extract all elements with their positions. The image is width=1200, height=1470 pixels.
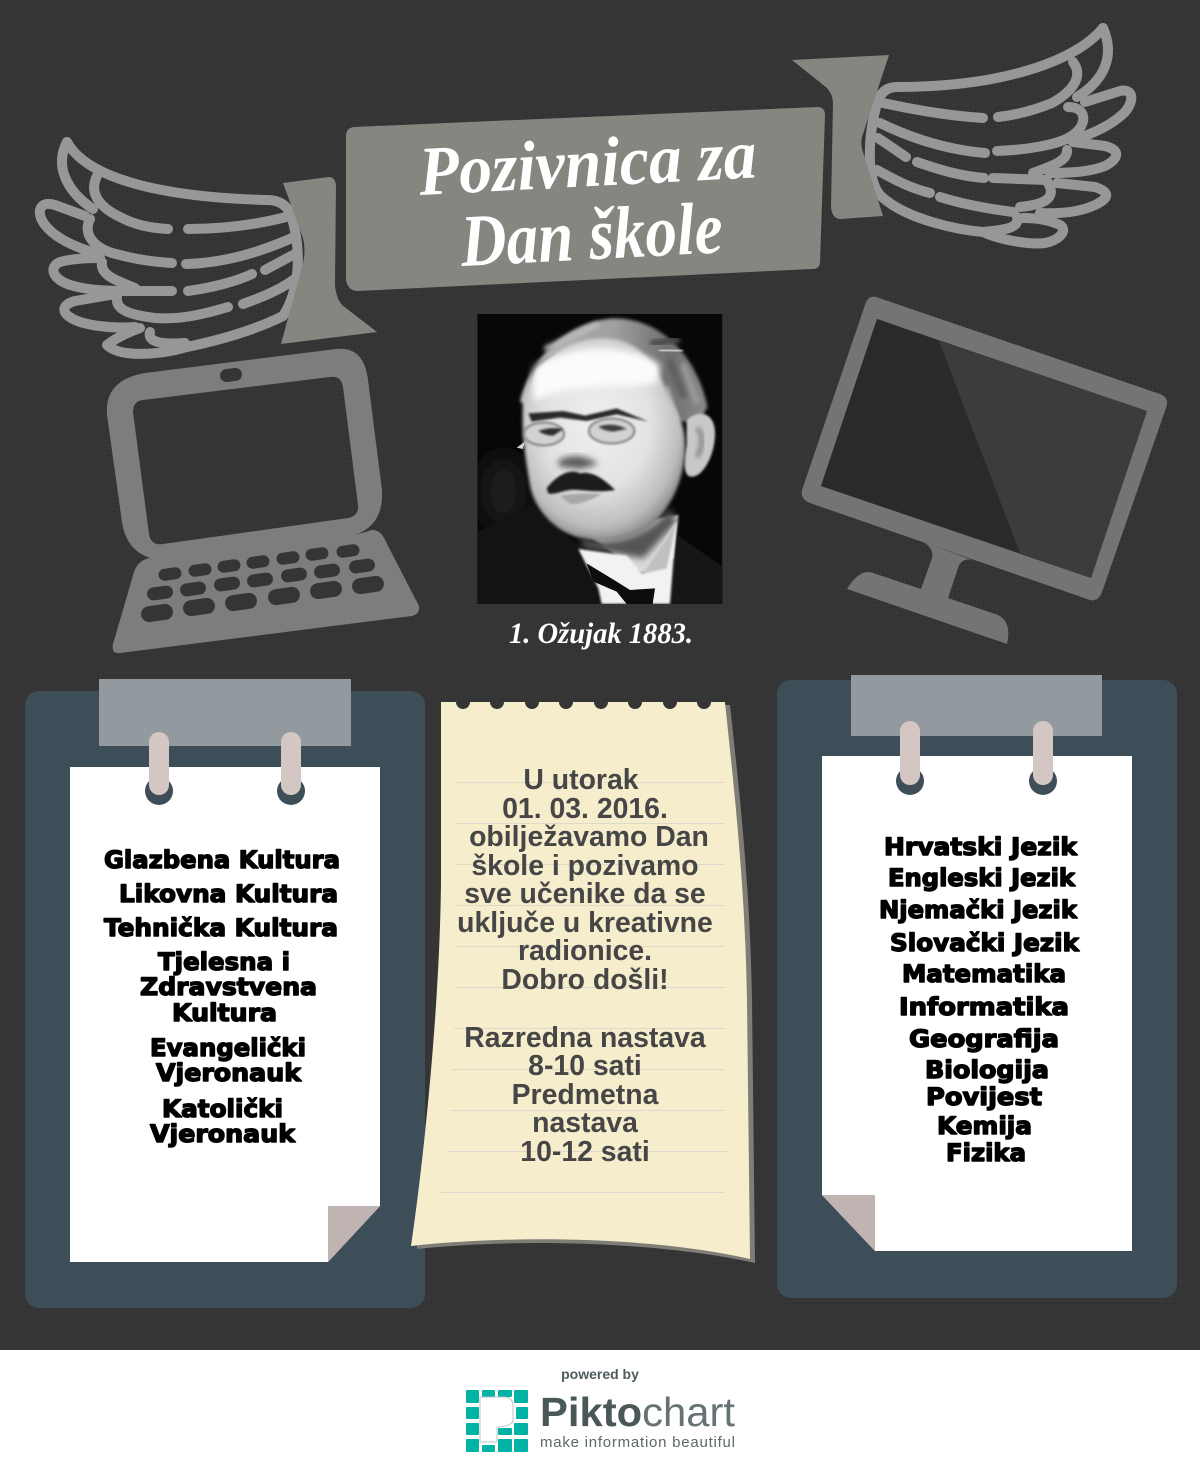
laptop keyboard bbox=[140, 543, 385, 623]
nose shadow bbox=[557, 456, 598, 469]
title: Pozivnica za bbox=[416, 116, 758, 211]
monitor screen bbox=[821, 319, 1020, 553]
banner: title ribbon bbox=[346, 107, 825, 291]
clipboard tape bbox=[851, 675, 1102, 736]
laptop camera bbox=[219, 367, 243, 383]
icon: left wing bbox=[40, 142, 298, 354]
hair bbox=[520, 318, 707, 422]
subject list: Kultura bbox=[172, 999, 277, 1027]
panel: right clipboard bbox=[777, 675, 1177, 1298]
panel: note paper bbox=[411, 702, 755, 1263]
title: Dan škole bbox=[458, 187, 725, 283]
neck bbox=[583, 515, 678, 573]
invitation text: uključe u kreativne bbox=[457, 907, 713, 939]
binder rings bbox=[145, 732, 305, 805]
paper sheet bbox=[70, 767, 380, 1262]
clipboard tape bbox=[99, 679, 351, 746]
panel: left clipboard bbox=[25, 679, 425, 1308]
powered by: powered by bbox=[561, 1366, 639, 1382]
glasses bbox=[524, 419, 634, 445]
paper sheet bbox=[822, 756, 1132, 1251]
monitor frame bbox=[802, 297, 1167, 600]
invitation text: Predmetna bbox=[512, 1079, 659, 1111]
invitation text bbox=[457, 764, 713, 1168]
subject list: Likovna Kultura bbox=[119, 880, 338, 908]
invitation text: 8-10 sati bbox=[528, 1050, 642, 1082]
clipboard board bbox=[777, 680, 1177, 1298]
jaw shadow bbox=[580, 508, 677, 558]
paper fold bbox=[822, 1195, 875, 1251]
subject list: Tehnička Kultura bbox=[104, 914, 338, 942]
note holes bbox=[456, 702, 711, 709]
hair streaks bbox=[547, 325, 697, 417]
lips bbox=[560, 493, 602, 504]
icon: Piktochart logo bbox=[466, 1390, 528, 1452]
invitation text: nastava bbox=[532, 1107, 638, 1139]
icon: monitor bbox=[802, 297, 1167, 644]
subject list: Vjeronauk bbox=[156, 1059, 302, 1087]
icon: laptop bbox=[107, 349, 419, 653]
invitation text: Razredna nastava bbox=[464, 1022, 706, 1054]
icon: right wing bbox=[870, 28, 1131, 243]
subject list: Povijest bbox=[926, 1083, 1042, 1111]
invitation text: škole i pozivamo bbox=[471, 850, 699, 882]
caption: date: 1. Ožujak 1883. bbox=[509, 617, 693, 650]
invitation text: sve učenike da se bbox=[464, 878, 706, 910]
subject list: Tjelesna i bbox=[158, 948, 290, 976]
note shadow bbox=[417, 705, 755, 1263]
portrait photo bbox=[477, 314, 722, 604]
subject list: Glazbena Kultura bbox=[104, 846, 340, 874]
subject list: Informatika bbox=[899, 993, 1069, 1021]
subject list bbox=[104, 846, 340, 1148]
invitation text: 01. 03. 2016. bbox=[502, 793, 668, 825]
note sheet bbox=[411, 702, 750, 1259]
subject list: Geografija bbox=[909, 1025, 1059, 1053]
monitor stand bbox=[847, 542, 1008, 644]
subject list: Engleski Jezik bbox=[888, 864, 1076, 892]
invitation text: 10-12 sati bbox=[520, 1136, 650, 1168]
invitation text: radionice. bbox=[518, 935, 652, 967]
ear bbox=[685, 414, 715, 477]
subject list: Matematika bbox=[902, 960, 1066, 988]
subject list: Njemački Jezik bbox=[879, 896, 1078, 924]
banner: right tail bbox=[792, 55, 889, 219]
eyes bbox=[538, 428, 563, 436]
paper fold bbox=[328, 1206, 380, 1262]
bow tie bbox=[587, 563, 655, 604]
Piktochart wordmark: Piktochart bbox=[540, 1389, 736, 1435]
footer: Piktochart branding bbox=[0, 1350, 1200, 1470]
shirt collar bbox=[578, 522, 677, 604]
subject list: Biologija bbox=[925, 1056, 1049, 1084]
moustache bbox=[547, 472, 615, 494]
tagline: make information beautiful bbox=[540, 1434, 735, 1451]
invitation text: obilježavamo Dan bbox=[469, 821, 709, 853]
clipboard board bbox=[25, 691, 425, 1308]
banner: left tail bbox=[281, 177, 377, 344]
binder rings bbox=[896, 721, 1057, 795]
subject list: Katolički bbox=[162, 1095, 283, 1123]
subject list: Evangelički bbox=[150, 1034, 306, 1062]
invitation text: Dobro došli! bbox=[501, 964, 669, 996]
subject list: Zdravstvena bbox=[140, 973, 317, 1001]
suit bbox=[477, 505, 603, 604]
title bbox=[416, 116, 758, 283]
subject list: Fizika bbox=[946, 1139, 1026, 1167]
subject list: Slovački Jezik bbox=[890, 929, 1080, 957]
subject list bbox=[879, 833, 1080, 1167]
invitation text: U utorak bbox=[523, 764, 639, 796]
subject list: Vjeronauk bbox=[150, 1120, 296, 1148]
forehead highlight bbox=[533, 349, 660, 402]
subject list: Hrvatski Jezik bbox=[884, 833, 1078, 861]
eyebrows bbox=[528, 408, 648, 422]
subject list: Kemija bbox=[937, 1112, 1032, 1140]
face bbox=[523, 338, 685, 541]
